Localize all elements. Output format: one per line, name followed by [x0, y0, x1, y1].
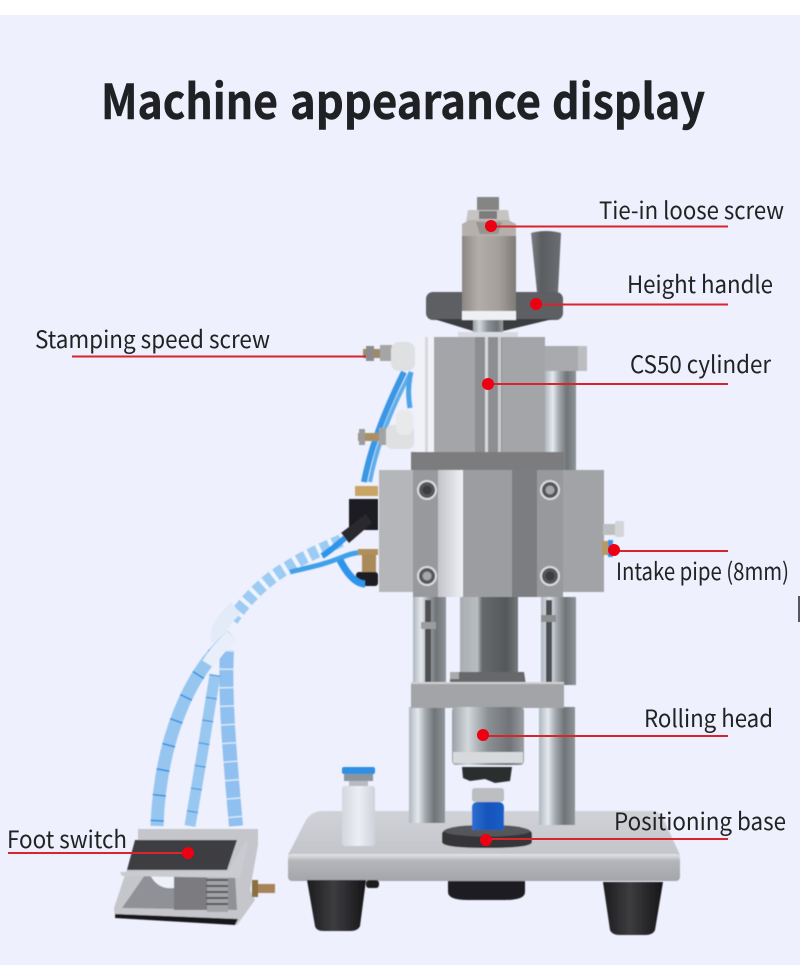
title: display	[552, 63, 705, 133]
marker: height handle	[530, 265, 773, 310]
stamping speed screws and fittings	[358, 342, 415, 449]
solenoid valve	[322, 486, 378, 586]
title: Machine	[101, 63, 278, 133]
marker: tie-in loose screw	[485, 191, 784, 232]
height handwheel	[426, 231, 563, 336]
CS50 cylinder	[411, 332, 564, 470]
marker: positioning base	[480, 802, 786, 846]
right guide rod upper	[545, 346, 587, 471]
base feet	[307, 880, 663, 935]
lower guide rods	[409, 597, 576, 825]
label: rolling head: Rolling head	[644, 699, 773, 734]
marker: CS50 cylinder	[482, 345, 772, 390]
slide block	[379, 470, 604, 597]
central tube and crossbar	[411, 597, 564, 708]
foot switch	[114, 829, 275, 925]
label: tie-in loose screw: Tie-in loose screw	[599, 191, 784, 226]
label: CS50 cylinder: CS50 cylinder	[630, 345, 772, 380]
label: foot switch: Foot switch	[7, 820, 127, 855]
marker: foot switch	[7, 820, 194, 859]
base plate	[288, 811, 680, 881]
intake fittings	[602, 521, 624, 557]
positioning base with blue vial	[442, 788, 532, 848]
label: stamping speed screw: Stamping speed screw	[35, 320, 270, 355]
sample vial	[342, 767, 375, 846]
machine illustration	[114, 197, 680, 935]
marker: intake pipe	[608, 544, 789, 587]
label: positioning base: Positioning base	[614, 802, 786, 837]
title	[101, 63, 705, 133]
top adjustment screw assembly	[462, 197, 516, 236]
title: appearance	[290, 63, 541, 133]
air hoses	[157, 372, 411, 826]
marker: rolling head	[477, 699, 773, 741]
label: height handle: Height handle	[627, 265, 773, 300]
rolling head	[452, 707, 524, 783]
